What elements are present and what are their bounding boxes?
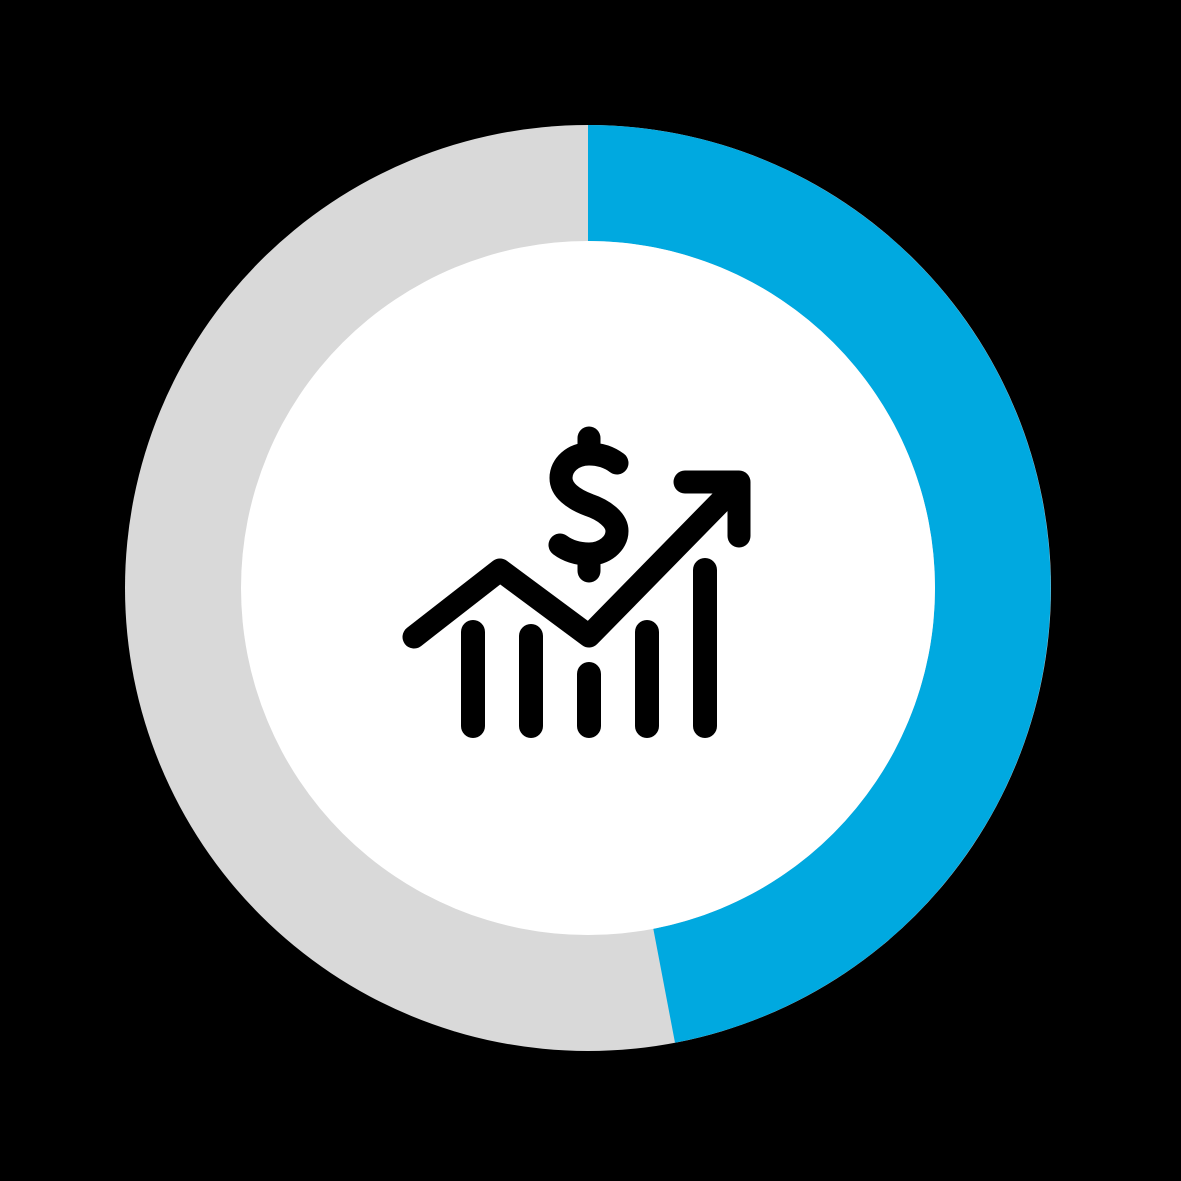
icon: rising chart with dollar sign	[414, 438, 739, 726]
inner white circle	[241, 241, 935, 935]
donut value: blue segment	[588, 125, 1051, 1043]
donut track: grey segment	[125, 125, 1051, 1051]
icon: dollar sign	[560, 438, 617, 571]
icon: bars	[473, 570, 705, 726]
icon: trend arrow	[414, 482, 739, 637]
